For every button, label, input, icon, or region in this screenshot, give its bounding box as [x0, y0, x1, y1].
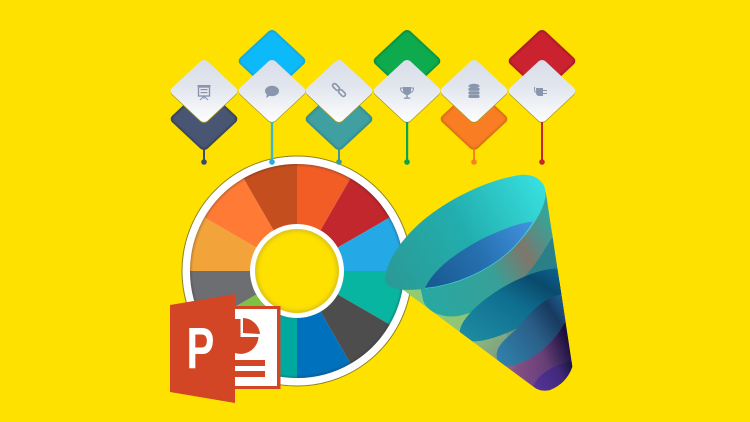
slide page — [233, 306, 280, 389]
funnel opening — [425, 222, 533, 288]
icon: projector screen — [198, 85, 210, 100]
icon: power plug — [534, 87, 547, 96]
funnel top rim — [385, 175, 546, 290]
icon: speech bubble — [265, 86, 279, 98]
wheel outer ring — [182, 156, 412, 386]
PowerPoint logo — [170, 294, 280, 403]
colour wheel — [182, 156, 412, 386]
pie icon — [243, 318, 260, 334]
funnel body layers — [402, 192, 572, 391]
white diamonds — [169, 58, 577, 125]
icon: trophy — [400, 87, 414, 99]
funnel — [385, 175, 580, 397]
icon: chain link — [332, 83, 346, 97]
wheel hub — [250, 224, 344, 318]
coloured diamonds behind — [169, 28, 577, 152]
letter P: P — [186, 315, 214, 381]
wheel segments — [190, 164, 404, 378]
text bars — [235, 360, 265, 366]
icon: database — [468, 84, 480, 98]
opening rim highlight — [425, 222, 533, 288]
connector lines and dots — [201, 122, 545, 165]
door — [170, 294, 235, 403]
